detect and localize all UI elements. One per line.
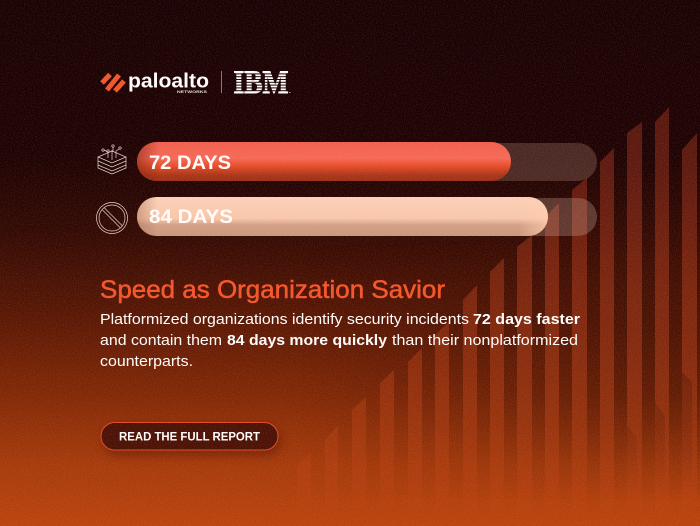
icon: Palo Alto Networks mark xyxy=(102,74,124,91)
stripe shadow notches xyxy=(627,372,692,490)
NETWORKS wordmark: NETWORKS xyxy=(177,89,207,94)
bar label: 84 DAYS xyxy=(149,207,233,228)
bar row: 72 days xyxy=(98,142,597,181)
bar label: 72 DAYS xyxy=(149,153,231,174)
decorative rising stripes xyxy=(298,107,697,484)
body text: than their nonplatformized xyxy=(392,332,578,349)
progress track xyxy=(137,143,597,181)
IBM logo: IBM xyxy=(234,65,288,101)
body text xyxy=(100,311,580,370)
body text: 84 days more quickly xyxy=(227,332,388,349)
body text: and contain them xyxy=(100,332,222,349)
logo divider xyxy=(221,71,222,93)
IBM logo: . xyxy=(289,89,291,95)
bar row: 84 days xyxy=(96,197,597,236)
body text: 72 days faster xyxy=(473,311,580,328)
body text: Platformized organizations identify security incidents xyxy=(100,311,469,328)
icon: prohibited sign xyxy=(96,202,128,234)
heading: Speed as Organization Savior xyxy=(100,276,445,304)
call-to-action button xyxy=(101,422,281,456)
body text: counterparts. xyxy=(100,353,193,370)
icon: layered stack with circuit lines xyxy=(98,145,126,174)
logos xyxy=(102,65,291,101)
call-to-action button: READ THE FULL REPORT xyxy=(119,430,261,444)
paloalto wordmark: paloalto xyxy=(128,70,209,92)
progress fill: 84 days xyxy=(137,197,548,236)
progress fill: 72 days xyxy=(137,142,511,181)
progress track xyxy=(137,198,597,236)
